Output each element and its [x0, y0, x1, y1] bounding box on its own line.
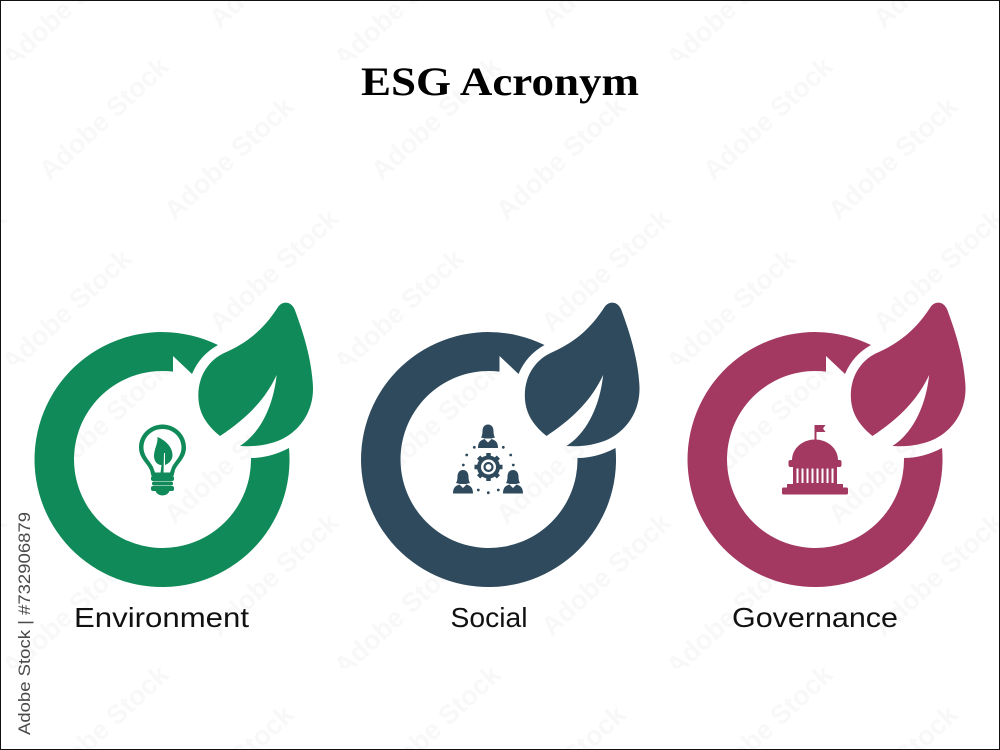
leaf: governance [851, 303, 966, 446]
ring: environment [35, 332, 290, 587]
leaf: environment [198, 303, 313, 446]
person left [453, 470, 473, 494]
panel: environment [35, 303, 313, 633]
leaf: social [525, 303, 640, 446]
title: ESG Acronym [361, 59, 639, 104]
person top [478, 424, 498, 448]
icon: capitol building [782, 425, 848, 494]
dots [462, 446, 515, 494]
gear [474, 453, 502, 481]
ring: governance [688, 332, 943, 587]
icon: three people around a gear [453, 424, 523, 494]
label: Governance: Governance [732, 602, 898, 633]
panel: governance [688, 303, 966, 633]
person right [503, 470, 523, 494]
label: Social: Social [450, 602, 528, 633]
icon: lightbulb with leaf [139, 424, 186, 496]
panel: social [361, 303, 640, 633]
ring: social [361, 332, 616, 587]
stock id sidebar: Adobe Stock | #732906879 [15, 512, 34, 735]
label: Environment: Environment [74, 602, 249, 633]
